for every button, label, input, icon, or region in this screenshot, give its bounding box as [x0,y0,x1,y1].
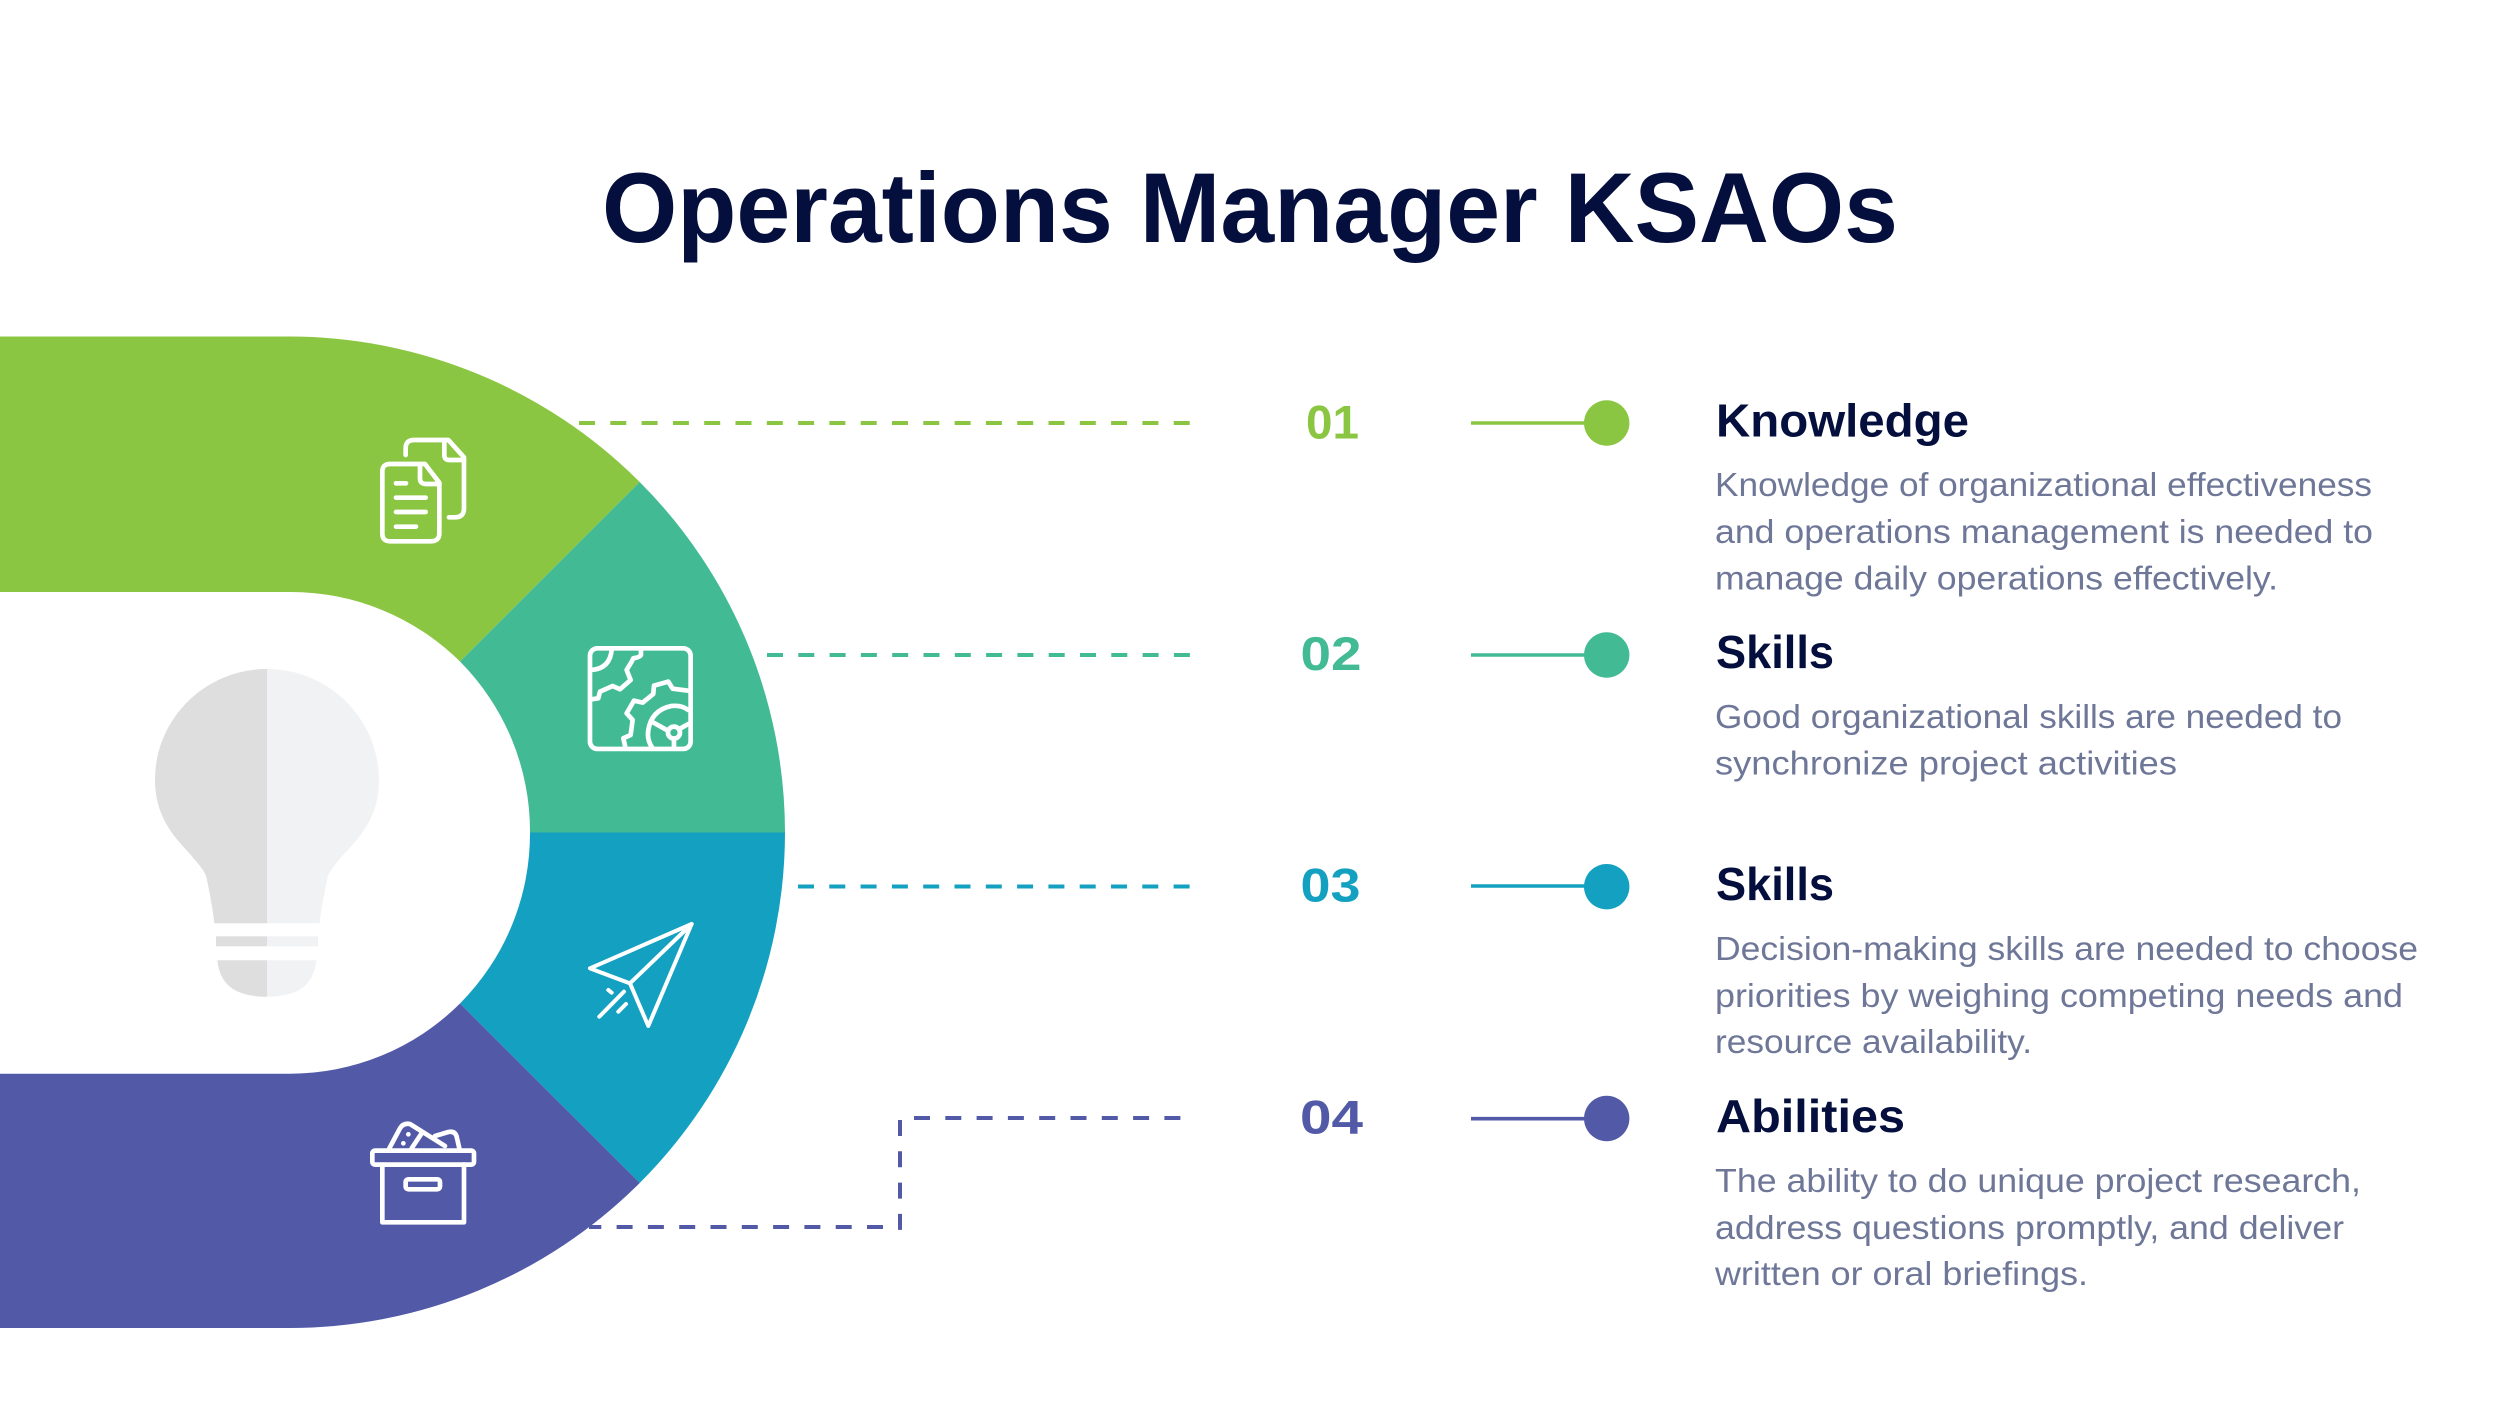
text block: Knowledge [1715,394,2373,598]
connector 1 [579,421,1190,425]
text block: Abilities: address questions promptly, and deliver [1715,1210,2344,1247]
text block: Skills decision-making: Decision-making skills are needed to choose [1715,931,2418,968]
segment: green [0,336,640,662]
text block: Skills organizational: Good organizational skills are needed to [1715,699,2342,736]
text block: Knowledge: Knowledge [1716,394,1969,446]
segment: purple [0,1004,640,1328]
number 04: 04 [1300,1090,1363,1144]
connector 4 [589,1118,1181,1232]
icon: paper plane [590,924,692,1026]
text block: Skills organizational: Skills [1716,626,1834,678]
icon: archive box [372,1124,474,1222]
text block: Knowledge: and operations management is needed to [1715,514,2373,551]
horseshoe diagram [0,336,785,1328]
text block: Skills decision-making [1715,858,2418,1061]
number 01: 01 [1306,396,1359,448]
text block: Skills decision-making: resource availability. [1715,1024,2032,1061]
text block: Abilities: The ability to do unique project research, [1715,1163,2361,1200]
text block: Skills organizational: synchronize project activities [1715,746,2177,782]
icon: map [590,648,691,749]
marker 1 [1471,400,1629,446]
segment: blue [460,832,785,1183]
marker 3 [1471,864,1629,909]
connector 2 [767,653,1190,657]
segment: teal [460,482,785,832]
icon: light bulb [155,669,379,997]
icon: documents [382,440,464,541]
number 02: 02 [1300,627,1362,680]
text block: Abilities [1714,1090,2361,1293]
text block: Knowledge: manage daily operations effectively. [1715,560,2278,598]
text block: Abilities: written or oral briefings. [1714,1256,2088,1293]
text block: Skills decision-making: priorities by weighing competing needs and [1715,978,2403,1015]
number 03: 03 [1300,858,1360,912]
marker 2 [1471,632,1629,678]
title: Operations Manager KSAOs [602,152,1898,263]
connector 3 [798,884,1190,888]
marker 4 [1471,1096,1629,1141]
text block: Skills organizational [1715,626,2342,782]
text block: Knowledge: Knowledge of organizational effectiveness [1715,467,2372,504]
text block: Abilities: Abilities [1716,1090,1905,1142]
text block: Skills decision-making: Skills [1716,858,1834,910]
